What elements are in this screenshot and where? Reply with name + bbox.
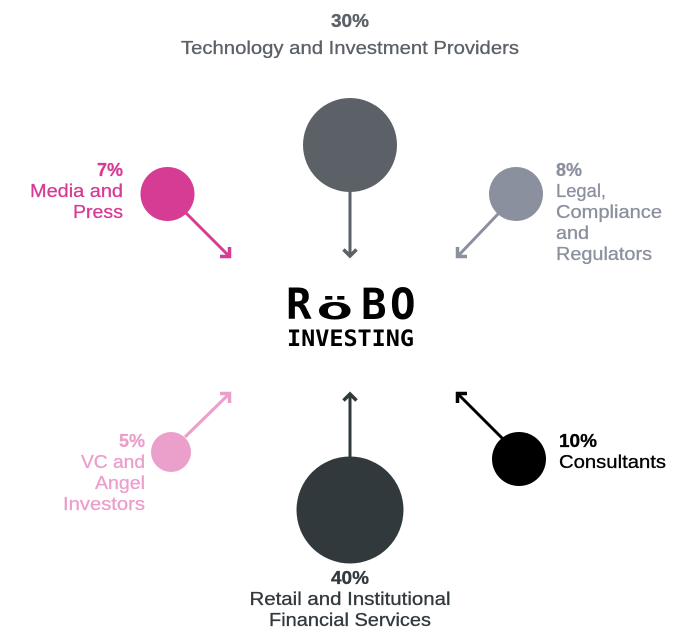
logo: robo investing: INVESTING: [287, 327, 414, 352]
label: vc and angel investors: [63, 430, 145, 514]
logo: robo investing: ö: [316, 292, 354, 326]
label: legal, compliance and regulators: Legal,: [556, 180, 606, 201]
label: retail and institutional financial services: Retail and Institutional: [250, 588, 450, 609]
label: legal, compliance and regulators: [556, 159, 662, 264]
node: technology and investment providers: [303, 98, 397, 256]
label: media and press: [30, 159, 123, 222]
label: vc and angel investors: Angel: [95, 472, 145, 493]
node: consultants: [458, 394, 546, 486]
node: retail and institutional financial services: [296, 394, 404, 564]
label: legal, compliance and regulators: Regulators: [556, 243, 652, 264]
node: vc and angel investors: [151, 394, 230, 472]
logo: robo investing: BO: [361, 281, 416, 330]
label: legal, compliance and regulators: 8%: [556, 159, 582, 180]
logo: robo investing: R: [286, 281, 312, 330]
label: consultants: [559, 430, 666, 472]
label: consultants: Consultants: [559, 451, 666, 472]
label: legal, compliance and regulators: Compliance: [556, 201, 662, 222]
label: technology and investment providers: [181, 10, 519, 58]
label: consultants: 10%: [559, 430, 597, 451]
node: legal, compliance and regulators: [458, 167, 543, 256]
label: legal, compliance and regulators: and: [556, 222, 589, 243]
label: media and press: Press: [73, 201, 123, 222]
label: vc and angel investors: VC and: [81, 451, 145, 472]
label: vc and angel investors: Investors: [63, 493, 145, 514]
label: retail and institutional financial services: 40%: [331, 567, 369, 588]
label: media and press: 7%: [97, 159, 123, 180]
label: retail and institutional financial services: Financial Services: [269, 609, 431, 630]
label: technology and investment providers: 30%: [331, 10, 369, 31]
label: retail and institutional financial services: [250, 567, 450, 630]
label: media and press: Media and: [30, 180, 123, 201]
logo: robo investing: [286, 281, 416, 352]
label: vc and angel investors: 5%: [119, 430, 145, 451]
node: media and press: [140, 167, 230, 256]
label: technology and investment providers: Technology and Investment Providers: [181, 37, 519, 58]
